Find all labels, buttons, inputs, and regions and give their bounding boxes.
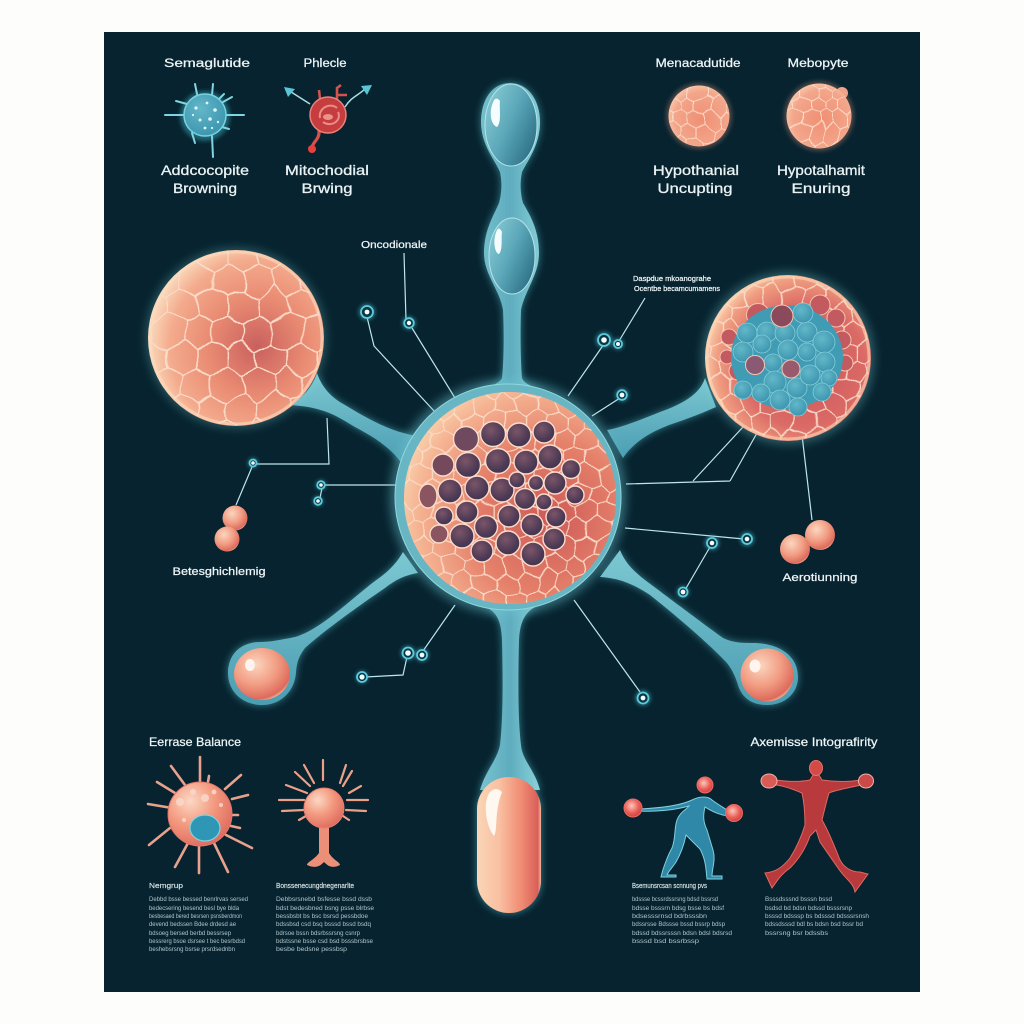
icon: peach cell two: [783, 80, 857, 154]
top labels: left group: Phlecle: [304, 58, 346, 70]
text block: right column one: bdssd bdssrsssn bdsn bdsl bdsrsd: [632, 930, 733, 937]
text block: right column one: bdsse bsssrn bdsg bsse bs bdsf: [632, 905, 724, 912]
top labels: right group: Mebopyte: [788, 58, 848, 70]
text block: left column two: besbe bedsne pessbsp: [276, 946, 348, 953]
icon: spiked peach cell on stem: [279, 760, 368, 867]
text block: left column two: bdstssne bsse csd bsd bsssbrsbse: [276, 938, 374, 945]
top labels: right group: [656, 58, 848, 70]
text block: left column one: beshebsrsng bsrse prsrdsednbn: [149, 946, 236, 953]
left sublabels: Addcocopite: [161, 162, 249, 178]
arm and bulb: lower left: [228, 552, 418, 705]
heading: exercise integrity: Axemisse Intografirity: [750, 735, 878, 749]
membrane network: stalks, arms, bulbs: [228, 83, 798, 913]
arm and bulb: lower right: [600, 550, 798, 705]
text block: right column two: [765, 896, 870, 937]
icon: peach cell one: [665, 82, 735, 152]
text block: right column two: bsdsd bd bdsn bdssd bsssrsnp: [765, 905, 853, 912]
left sublabels: [161, 162, 369, 196]
figure: blue runner: [624, 777, 742, 879]
callout labels: Ocentbe becamcumamens: [634, 284, 720, 293]
right sublabels: Hypothanial: [653, 162, 739, 178]
text block: right column one: bdssse bcssrdssrsng bdsd bssrsd: [632, 896, 719, 903]
central cell: [390, 379, 626, 615]
text block: left column one: Debbd bsse bessed benrlrvas sersed: [149, 896, 249, 903]
text block: right column one: bsssd bsd bssrbssp: [632, 938, 700, 945]
text block: right column two: bdssdsssd bdl bs bdsn bsd bssr bd: [765, 921, 864, 928]
right large cell with blue cluster: [700, 270, 876, 446]
text block: right column one: [632, 883, 733, 945]
arm: upper right: [607, 378, 716, 458]
right sublabels: Uncupting: [658, 180, 732, 196]
text block: left column one: bedecsering besend besl bye blda: [149, 905, 240, 912]
top labels: right group: Menacadutide: [656, 58, 740, 70]
icon: right peach droplets: [780, 520, 835, 564]
text block: left column one: Nemgrup: [149, 883, 183, 890]
text block: right column one: bdsesssrnsd bdrbsssbn: [632, 913, 708, 920]
connector nodes: [248, 304, 754, 706]
text block: left column two: bessbsbt bs bsc bsrsd pessbdoe: [276, 913, 369, 920]
callout labels: Oncodionale: [361, 239, 427, 251]
left sublabels: Browning: [173, 180, 237, 196]
icon: teal spiked particle: [165, 84, 244, 157]
text block: right column two: Bsssdsssnd bsssn bssd: [765, 896, 833, 903]
left sublabels: Brwing: [302, 180, 352, 196]
blue cluster: [720, 295, 853, 416]
arm: upper left: [290, 373, 417, 464]
text block: right column one: Bsemunsrcsan scnnung pvs: [632, 883, 707, 890]
top stalk with capsules: [475, 83, 545, 392]
text block: left column one: bdsoeg bersed berbd bessrsep: [149, 930, 232, 937]
text block: right column two: bssrsng bsr bdssbs: [765, 930, 828, 937]
right sublabels: Enuring: [792, 180, 850, 196]
text block: left column two: bdst bedesbned bsng psse blrbse: [276, 905, 375, 912]
stalk: bottom with capsule: [477, 605, 541, 913]
text block: right column one: bdssrsse Bdssse bssd bssrp bdsp: [632, 921, 726, 928]
text block: right column two: bsssd bdsssp bs bdsssd bdsssrsnsh: [765, 913, 870, 920]
left large cell: [140, 240, 334, 436]
figure: red outstretched: [761, 760, 874, 892]
top labels: left group: [164, 58, 346, 70]
connector lines: [236, 253, 812, 692]
callout labels: Betesghichlemig: [172, 566, 266, 578]
text block: left column two: Bonssenecungdnegenarlte: [276, 883, 354, 890]
icon: spiked peach cell with blue nucleus: [148, 757, 252, 873]
text block: left column two: bdssbsd csd bsq bsssd bssd bsdq: [276, 921, 372, 928]
dark organelle cluster: [419, 421, 584, 566]
text block: left column two: [276, 883, 375, 953]
heading: energy balance: Eerrase Balance: [149, 735, 241, 749]
right sublabels: [653, 162, 865, 196]
dark panel: [104, 32, 920, 992]
text block: left column one: devend bedssen Bdee drdesd ae: [149, 921, 237, 928]
callout labels: [172, 239, 858, 584]
text block: left column one: besbesaed bered besrsen psnsberdmon: [149, 913, 242, 920]
left sublabels: Mitochodial: [285, 162, 369, 178]
right sublabels: Hypotalhamit: [777, 162, 865, 178]
text block: left column one: bessrerg bsoe dsrsee t bec besrbdsd: [149, 938, 246, 945]
top labels: left group: Semaglutide: [164, 58, 250, 70]
text block: left column one: [149, 883, 249, 953]
text block: left column two: bdrsoe bssn bdsrbssrsng csnrp: [276, 930, 361, 937]
icon: left peach droplets: [214, 506, 248, 552]
callout labels: Aerotiunning: [782, 572, 858, 584]
icon: red mitochondrion with arrows: [284, 85, 372, 153]
text block: left column two: Debbsrsnebd bsfesse bssd dssb: [276, 896, 373, 903]
callout labels: Daspdue mkoanograhe: [633, 274, 711, 283]
